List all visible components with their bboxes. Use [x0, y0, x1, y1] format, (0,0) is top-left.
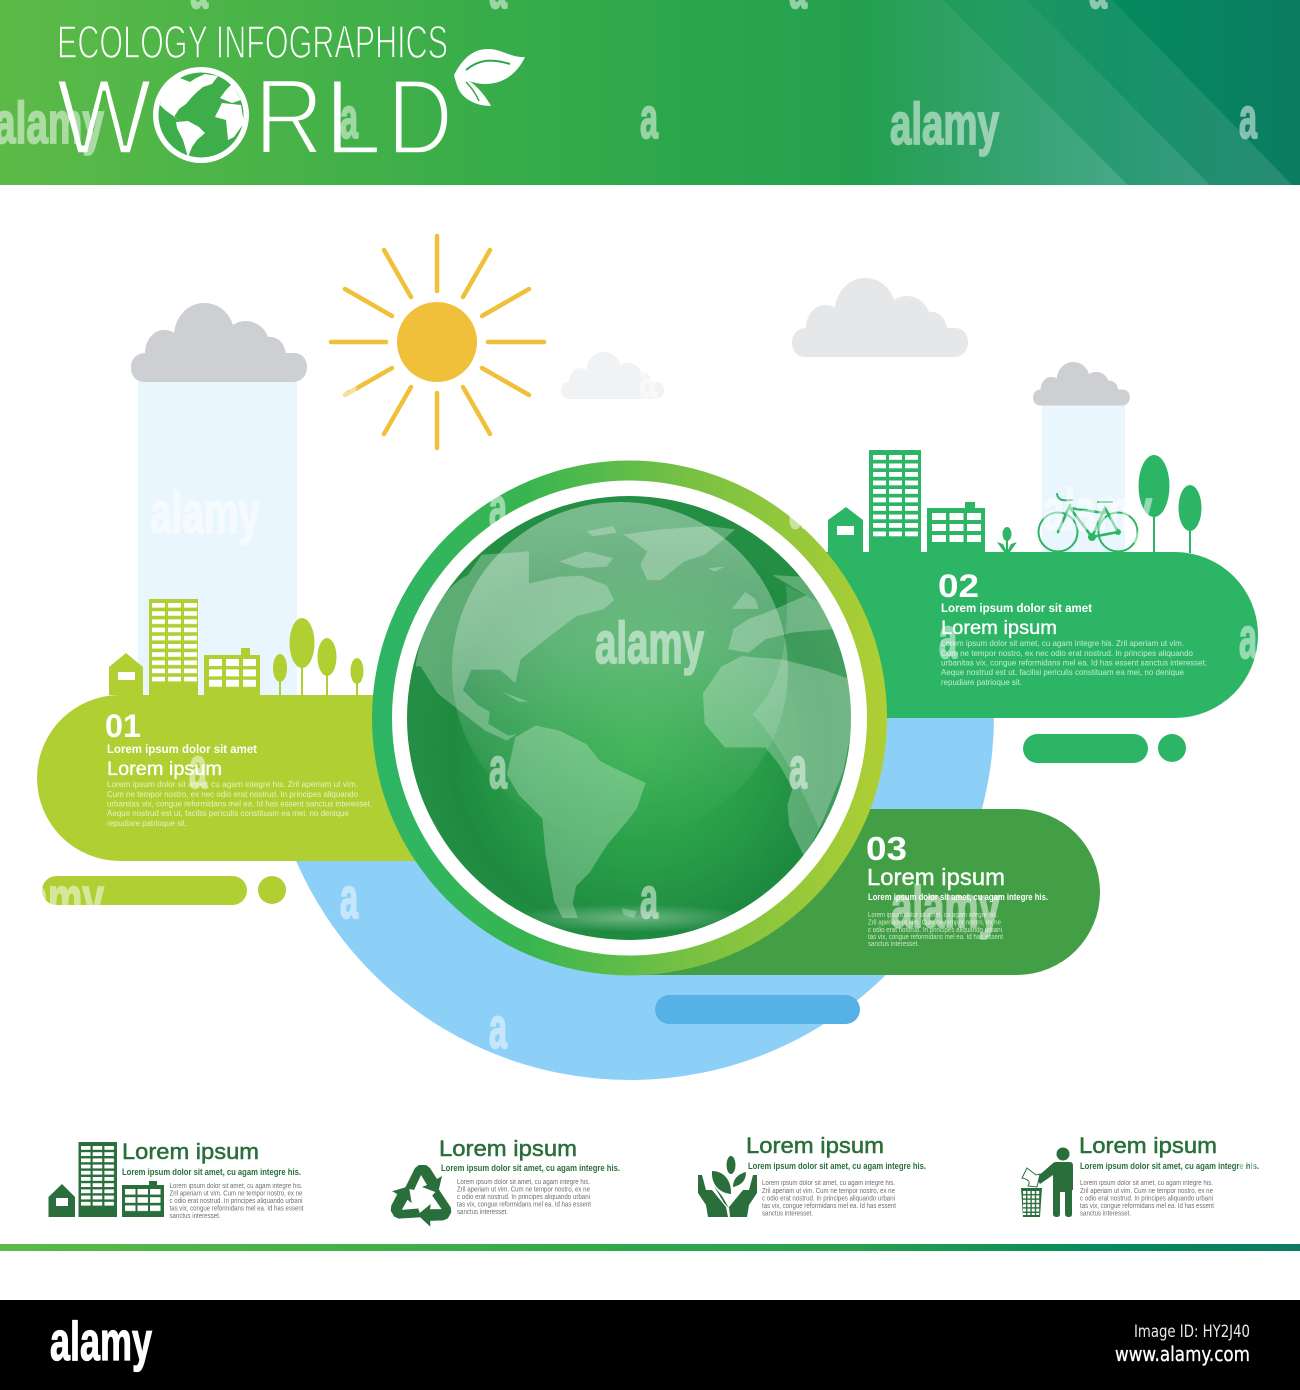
body text: c odio erat nostrud. In principes aliquando urbani [762, 1196, 895, 1202]
bottom item 1 [48, 1139, 304, 1220]
body text: Lorem ipsum dolor sit amet, cu agam integre his. [762, 1180, 895, 1187]
cloud small faint [561, 352, 664, 399]
subheading 02: Lorem ipsum dolor sit amet [941, 603, 1092, 615]
body text 03: c odio erat nostrud. In principes aliquando urbani [868, 927, 1002, 934]
watermarks: a [189, 736, 207, 801]
icon: bicycle [1038, 494, 1138, 552]
title: world [56, 56, 453, 177]
watermarks: a [489, 996, 507, 1061]
cloud right [1033, 362, 1130, 405]
body text: tas vix, congue reformidans mel ea. Id has essent [457, 1202, 591, 1208]
icon: recycle [383, 1165, 458, 1232]
body text [1080, 1180, 1214, 1218]
watermarks: a [489, 476, 507, 541]
body text: Zril aperiam ut vim. Cum ne tempor nostro, ex ne [170, 1190, 303, 1198]
watermarks: a [340, 866, 358, 931]
body text 01: repudiare patrioque sit. [107, 818, 187, 828]
icon: leaves in title [454, 49, 525, 106]
heading 01: Lorem ipsum [107, 759, 222, 780]
body text 03: Lorem ipsum dolor sit amet, cu agam integre his. [868, 912, 998, 919]
title: ecology infographics: ECOLOGY INFOGRAPHICS [57, 16, 448, 68]
body text 01: Aeque nostrud est ut, facilisi periculis constituam ea mei, no denique [107, 808, 349, 818]
bottom glow [527, 906, 732, 930]
icon: white globe in title [153, 67, 249, 163]
body text 02: repudiare patrioque sit. [941, 677, 1022, 687]
heading 03: Lorem ipsum [867, 864, 1005, 890]
body text: Zril aperiam ut vim. Cum ne tempor nostro, ex ne [1080, 1188, 1213, 1195]
body text: sanctus interesset. [457, 1209, 508, 1216]
watermarks: a [1239, 1126, 1257, 1191]
rain column right [1042, 403, 1125, 552]
body text: sanctus interesset. [1080, 1210, 1131, 1218]
body text 02: Cum ne tempor nostro, ex nec odio erat nostrud. In principes aliquando [941, 648, 1193, 658]
subheading 03: Lorem ipsum dolor sit amet, cu agam integre his. [868, 892, 1048, 902]
body text: c odio erat nostrud. In principes aliquando urbani [1080, 1196, 1213, 1202]
green city skyline with bicycle [828, 450, 1202, 553]
title: world: L [324, 56, 382, 177]
body text: c odio erat nostrud. In principes aliquando urbani [170, 1198, 303, 1205]
icon: person with trash can [1021, 1148, 1073, 1217]
watermarks: alamy [891, 875, 1000, 940]
body text 01: urbanitas vix, congue reformidans mel ea. Id has essent sanctus interesset. [107, 798, 372, 808]
body text: c odio erat nostrud. In principes aliquando urbani [457, 1194, 590, 1201]
website: www.alamy.com [1115, 1342, 1250, 1366]
body text 02: Aeque nostrud est ut, facilisi periculis constituam ea mei, no denique [941, 667, 1184, 677]
watermarks: a [340, 86, 358, 151]
blue bar [655, 995, 860, 1024]
watermarks: a [789, 476, 807, 541]
watermarks: a [640, 866, 658, 931]
body text: tas vix, congue reformidans mel ea. Id has essent [170, 1206, 304, 1212]
body text 01 [107, 779, 372, 828]
watermarks: a [789, 736, 807, 801]
body text [170, 1183, 304, 1220]
panel 01 [37, 695, 537, 861]
gloss highlight [452, 502, 788, 793]
globe with ring [372, 460, 887, 976]
subheading 01: Lorem ipsum dolor sit amet [107, 744, 257, 756]
body text 02: Lorem ipsum dolor sit amet, cu agam integre his. Zril aperiam ut vim. [941, 638, 1184, 648]
large blue circle [296, 718, 994, 1080]
watermarks: a [939, 606, 957, 671]
number 02: 02 [938, 568, 979, 604]
footer logo: alamy [50, 1310, 152, 1372]
panel 02 [700, 552, 1258, 718]
lime bar and dot [42, 876, 286, 905]
watermarks: a [1239, 86, 1257, 151]
title: world: D [387, 56, 453, 177]
body text: Zril aperiam ut vim. Cum ne tempor nostro, ex ne [762, 1188, 895, 1195]
heading: Lorem ipsum [439, 1136, 577, 1161]
title: world: R [254, 56, 324, 177]
icon: sun [331, 236, 544, 448]
body text [762, 1180, 896, 1218]
right crescent highlight [752, 585, 855, 828]
body text: Lorem ipsum dolor sit amet, cu agam integre his. [170, 1183, 303, 1190]
cloud middle large [792, 278, 968, 357]
watermarks: alamy [890, 92, 999, 157]
watermarks: alamy [150, 481, 260, 546]
watermarks: a [640, 86, 658, 151]
number 03: 03 [866, 830, 907, 867]
footer line [0, 1244, 1300, 1251]
body text 03: sanctus interesset. [868, 941, 919, 948]
number 01: 01 [105, 708, 141, 744]
bottom item 4 [1021, 1133, 1259, 1218]
body text [457, 1179, 591, 1216]
watermarks: a [1239, 606, 1257, 671]
body text 03 [868, 912, 1003, 948]
subheading: Lorem ipsum dolor sit amet, cu agam integre his. [441, 1163, 620, 1173]
body text 02 [941, 638, 1207, 687]
heading: Lorem ipsum [746, 1133, 884, 1158]
body text: Zril aperiam ut vim. Cum ne tempor nostro, ex ne [457, 1186, 590, 1194]
watermarks: a [639, 346, 657, 411]
subheading: Lorem ipsum dolor sit amet, cu agam integre his. [1080, 1161, 1259, 1171]
icon: hands with plant [698, 1156, 757, 1217]
heading: Lorem ipsum [122, 1139, 259, 1164]
watermarks: alamy [595, 611, 704, 676]
body text: tas vix, congue reformidans mel ea. Id has essent [762, 1203, 896, 1210]
cloud left [131, 303, 307, 382]
body text: sanctus interesset. [170, 1213, 221, 1220]
bottom item 2 [383, 1136, 620, 1232]
body text: sanctus interesset. [762, 1210, 813, 1218]
body text 01: Lorem ipsum dolor sit amet, cu agam integre his. Zril aperiam ut vim. [107, 779, 358, 789]
image id: Image ID: HY2J40 [1134, 1322, 1250, 1342]
subheading: Lorem ipsum dolor sit amet, cu agam integre his. [748, 1161, 926, 1171]
watermarks: a [340, 346, 358, 411]
body text: Lorem ipsum dolor sit amet, cu agam integre his. [457, 1179, 590, 1186]
body text 03: Zril aperiam ut vim. Cum ne tempor nostro, ex ne [868, 920, 1001, 926]
body text: tas vix, congue reformidans mel ea. Id has essent [1080, 1203, 1214, 1210]
footer black bar [0, 1300, 1300, 1390]
body text 03: tas vix, congue reformidans mel ea. Id has essent [868, 934, 1003, 941]
continents [416, 526, 853, 918]
title: world: W [56, 56, 152, 177]
panel 03 [625, 809, 1100, 975]
lime city skyline [109, 599, 364, 696]
watermarks: alamy [1043, 478, 1152, 543]
icon: city [48, 1142, 164, 1217]
subheading: Lorem ipsum dolor sit amet, cu agam integre his. [122, 1167, 301, 1177]
watermarks: a [489, 736, 507, 801]
body text 02: urbanitas vix, congue reformidans mel ea. Id has essent sanctus interesset. [941, 658, 1207, 668]
green bar and dot [1023, 734, 1186, 763]
body text 01: Cum ne tempor nostro, ex nec odio erat nostrud. In principes aliquando [107, 789, 358, 799]
icon: flower [997, 527, 1017, 552]
rain column left [138, 380, 297, 700]
heading: Lorem ipsum [1079, 1133, 1217, 1158]
heading 02: Lorem ipsum [941, 618, 1057, 639]
header banner [0, 0, 1300, 185]
body text: Lorem ipsum dolor sit amet, cu agam integre his. [1080, 1180, 1213, 1187]
bottom item 3 [698, 1133, 926, 1218]
